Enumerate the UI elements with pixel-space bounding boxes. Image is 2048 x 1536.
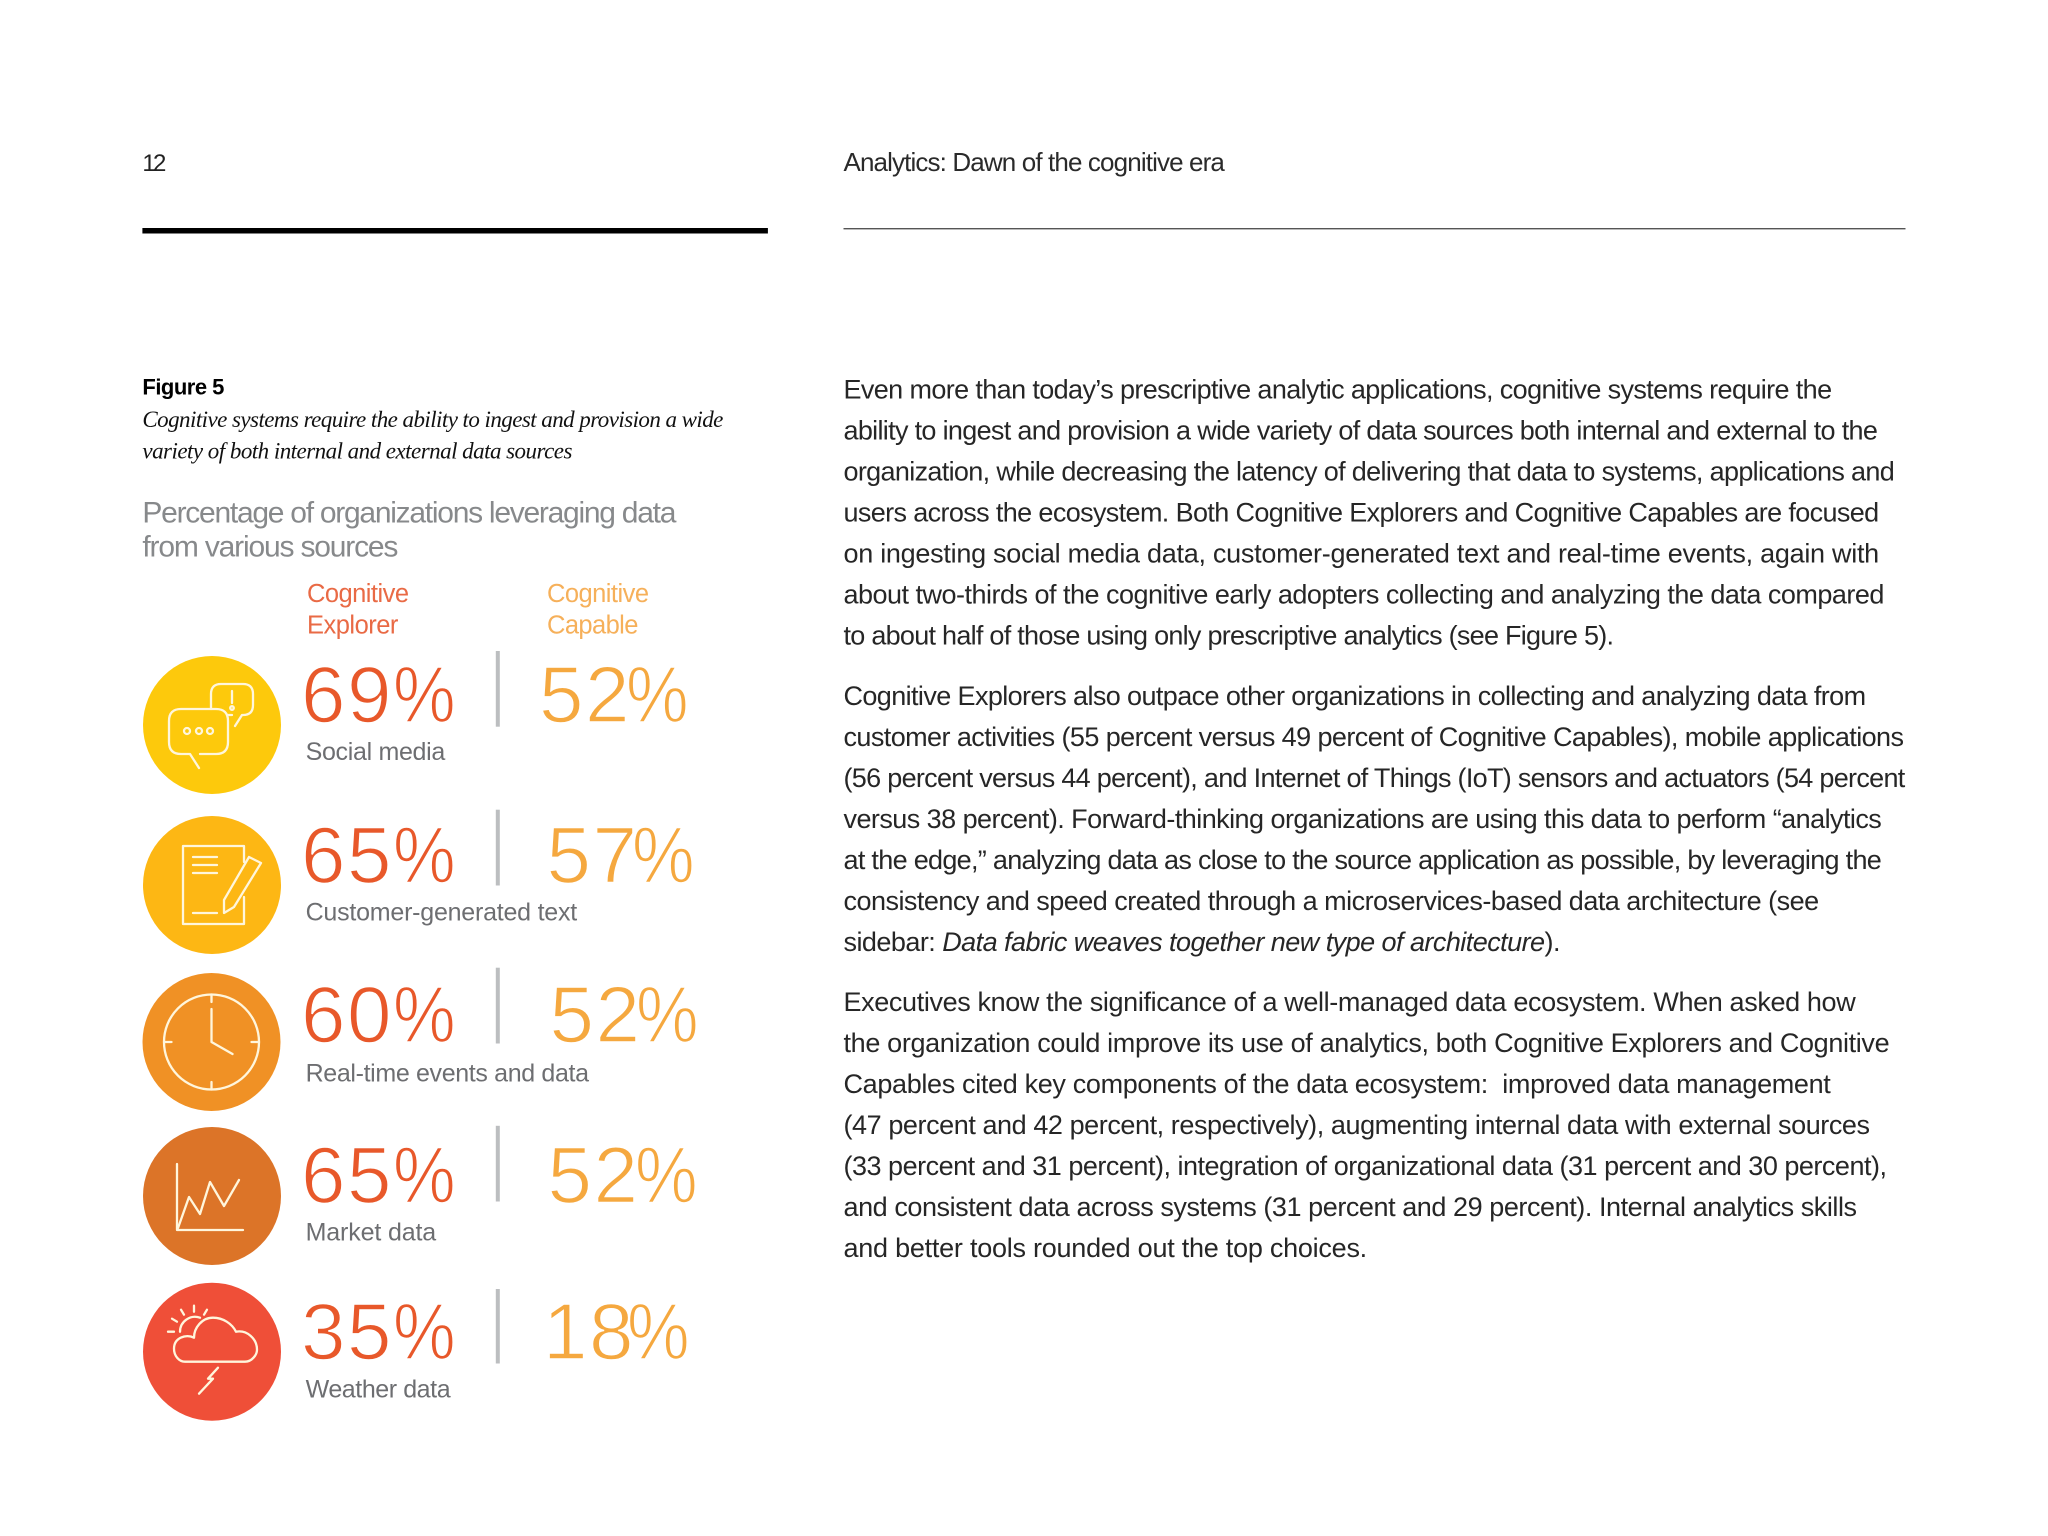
value: explorer 65%: % xyxy=(393,1130,457,1219)
paragraph 1: ability to ingest and provision a wide variety of data sources both internal and external to the xyxy=(844,415,1878,445)
running header: Analytics: Dawn of the cognitive era xyxy=(844,147,1225,177)
paragraph 1 xyxy=(844,374,1895,650)
paragraph 2: (56 percent versus 44 percent), and Internet of Things (IoT) sensors and actuators (54 percent xyxy=(844,763,1906,793)
divider xyxy=(496,810,500,886)
value: explorer 35%: 35 xyxy=(301,1287,393,1376)
paragraph 3: and better tools rounded out the top choices. xyxy=(844,1233,1367,1263)
paragraph 3: the organization could improve its use of analytics, both Cognitive Explorers and Cognitive xyxy=(844,1028,1890,1058)
value: explorer 65% xyxy=(301,1130,457,1220)
paragraph 1: Even more than today’s prescriptive analytic applications, cognitive systems require the xyxy=(844,374,1832,404)
paragraph 1: to about half of those using only prescriptive analytics (see Figure 5). xyxy=(844,620,1614,650)
column heading: Cognitive Capable xyxy=(547,580,649,639)
paragraph 2: consistency and speed created through a microservices-based data architecture (see xyxy=(844,886,1819,916)
row: social media xyxy=(143,650,690,794)
paragraph 3: Executives know the significance of a well-managed data ecosystem. When asked how xyxy=(844,987,1856,1017)
value: capable 52%: 52 xyxy=(548,1130,639,1220)
panel: figure 5 xyxy=(142,374,723,1421)
figure caption: Cognitive systems require the ability to ingest and provision a wide xyxy=(142,407,723,432)
value: capable 57% xyxy=(546,810,696,900)
label: Customer-generated text xyxy=(306,899,577,927)
divider xyxy=(496,1289,500,1364)
value: explorer 35%: % xyxy=(393,1287,457,1376)
icon: document and pencil xyxy=(143,816,281,954)
value: explorer 69%: 69 xyxy=(301,650,393,739)
paragraph 1: users across the ecosystem. Both Cognitive Explorers and Cognitive Capables are focused xyxy=(844,497,1879,527)
row: customer-generated text xyxy=(143,810,696,954)
paragraph 2: at the edge,” analyzing data as close to the source application as possible, by leveraging the xyxy=(844,845,1882,875)
value: explorer 60%: 60 xyxy=(301,970,393,1059)
value: explorer 69%: % xyxy=(393,650,457,739)
label: Real-time events and data xyxy=(306,1059,589,1087)
figure caption: variety of both internal and external data sources xyxy=(142,438,572,463)
paragraph 3: (47 percent and 42 percent, respectively), augmenting internal data with external sources xyxy=(844,1110,1870,1140)
column heading: Cognitive Capable: Capable xyxy=(547,611,638,639)
value: explorer 65%: 65 xyxy=(301,810,393,900)
value: capable 52% xyxy=(550,970,700,1059)
paragraph 3: (33 percent and 31 percent), integration of organizational data (31 percent and 30 percent), xyxy=(844,1151,1887,1181)
paragraph 1: organization, while decreasing the latency of delivering that data to systems, applications and xyxy=(844,456,1895,486)
paragraph 2: Cognitive Explorers also outpace other organizations in collecting and analyzing data from xyxy=(844,681,1866,711)
value: capable 52%: 52 xyxy=(539,650,631,739)
paragraph 2 xyxy=(844,681,1906,957)
value: explorer 60% xyxy=(301,970,457,1059)
value: capable 52%: 52 xyxy=(550,970,641,1059)
paragraph 3: Capables cited key components of the data ecosystem: improved data management xyxy=(844,1069,1831,1099)
paragraph 3: and consistent data across systems (31 percent and 29 percent). Internal analytics skills xyxy=(844,1192,1857,1222)
value: capable 52%: % xyxy=(636,970,700,1059)
label: Market data xyxy=(306,1219,436,1247)
column heading: Cognitive Explorer: Cognitive xyxy=(307,580,409,608)
paragraph 1: on ingesting social media data, customer-generated text and real-time events, again with xyxy=(844,538,1879,568)
value: explorer 65%: % xyxy=(393,810,457,899)
icon: speech bubbles xyxy=(143,656,281,794)
chart subtitle: from various sources xyxy=(142,530,398,563)
chart subtitle: Percentage of organizations leveraging data xyxy=(142,496,677,529)
icon: line chart xyxy=(143,1127,281,1265)
thin rule, right column xyxy=(844,228,1906,229)
value: explorer 69% xyxy=(301,650,457,739)
paragraph 3 xyxy=(844,987,1890,1263)
icon: cloud, sun and lightning xyxy=(143,1283,281,1421)
divider xyxy=(496,1126,500,1202)
row: weather data xyxy=(143,1283,691,1421)
paragraph 2: versus 38 percent). Forward-thinking organizations are using this data to perform “analytics xyxy=(844,804,1882,834)
value: capable 18%: % xyxy=(627,1287,691,1376)
figure label: Figure 5 xyxy=(142,374,224,399)
value: capable 18% xyxy=(543,1287,691,1376)
value: capable 52%: % xyxy=(635,1130,699,1219)
value: capable 52%: % xyxy=(626,650,690,739)
chart subtitle xyxy=(142,496,677,563)
row: real-time events and data xyxy=(142,968,700,1111)
value: capable 52% xyxy=(539,650,690,739)
row: market data xyxy=(143,1126,699,1265)
label: Social media xyxy=(306,738,445,766)
value: capable 57%: % xyxy=(632,810,696,899)
icon: clock xyxy=(142,973,280,1111)
value: explorer 65% xyxy=(301,810,457,900)
text block: body copy xyxy=(844,374,1906,1263)
page number: 12 xyxy=(142,150,166,177)
thick rule, left column xyxy=(142,228,768,234)
divider xyxy=(496,651,500,727)
paragraph 1: about two-thirds of the cognitive early adopters collecting and analyzing the data compared xyxy=(844,579,1884,609)
value: explorer 65%: 65 xyxy=(301,1130,393,1220)
column heading: Cognitive Capable: Cognitive xyxy=(547,580,649,608)
value: capable 18%: 18 xyxy=(543,1287,635,1376)
value: explorer 35% xyxy=(301,1287,457,1376)
value: capable 52% xyxy=(548,1130,699,1220)
column heading: Cognitive Explorer: Explorer xyxy=(307,611,399,639)
value: capable 57%: 57 xyxy=(546,810,638,900)
label: Weather data xyxy=(306,1375,451,1403)
column heading: Cognitive Explorer xyxy=(307,580,409,639)
figure caption xyxy=(142,407,723,463)
paragraph 2: customer activities (55 percent versus 49 percent of Cognitive Capables), mobile applications xyxy=(844,722,1904,752)
paragraph 2: sidebar: Data fabric weaves together new type of architecture). xyxy=(844,927,1560,957)
value: explorer 60%: % xyxy=(393,970,457,1059)
divider xyxy=(496,968,500,1044)
